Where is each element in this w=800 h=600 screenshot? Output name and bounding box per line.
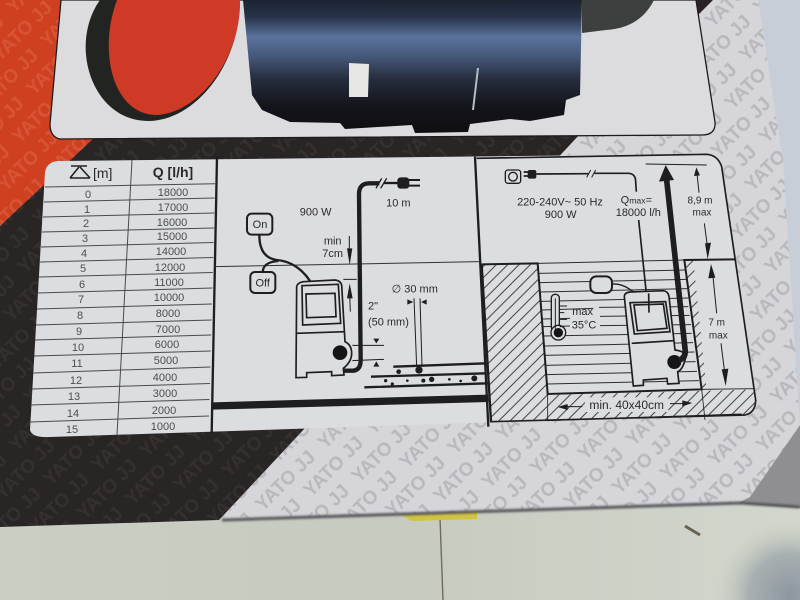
table column: head values: 0 (85, 189, 91, 201)
outer frame (477, 154, 756, 422)
measurement: min. 40x40cm: min. 40x40cm (589, 398, 664, 412)
measurement: hose diameter: 2" (368, 300, 378, 312)
table column: head values: 6 (79, 279, 85, 291)
photo: pump body (243, 0, 654, 133)
table column: flow values: 8000 (156, 308, 180, 320)
table header: head: [m] (93, 165, 112, 181)
measurement: hose diameter: (50 mm) (368, 316, 409, 328)
switch: On: On (253, 219, 267, 231)
table column: head values: 5 (80, 263, 86, 275)
measurement: 8,9 m max (688, 167, 712, 259)
label: Qmax flow: 18000 l/h (616, 207, 661, 219)
table column: head values: 7 (78, 294, 84, 306)
panel: installation in shallow water (212, 157, 488, 433)
pump (624, 291, 686, 386)
arrow: delivery head (646, 164, 707, 360)
table column: head values: 2 (83, 218, 89, 230)
label: 900 W: 900 W (300, 207, 332, 219)
table: head and flow (30, 160, 215, 436)
table column: flow values: 10000 (154, 292, 184, 304)
thermometer and max temperature (551, 294, 596, 340)
table column: flow values: 18000 (158, 187, 188, 199)
measurement: 8,9 m max: 8,9 m (688, 195, 712, 206)
measurement: hose diameter (352, 300, 409, 367)
table column: head values: 10 (72, 342, 84, 354)
water lines (538, 260, 699, 384)
measurement: min 7cm: 7cm (322, 248, 343, 260)
table column: head values: 1 (84, 204, 90, 216)
yellow object under box (398, 511, 477, 521)
float switch cords (259, 235, 316, 293)
table column: flow values: 1000 (151, 421, 175, 433)
panel: product photo (50, 0, 715, 139)
pit outline (482, 259, 735, 394)
measurement: 8,9 m max: max (693, 207, 711, 218)
box background: dark band (0, 133, 581, 527)
thermometer and max temperature: max (572, 306, 594, 318)
table column: head values: 12 (70, 375, 82, 387)
measurement: min 7cm (322, 235, 357, 312)
measurement: 7 m max: max (709, 331, 728, 342)
label: Qmax flow (616, 194, 661, 219)
measurement: 7 m max (708, 264, 728, 386)
thermometer and max temperature: 35°C (572, 319, 596, 331)
table column: flow values (151, 187, 188, 433)
sediment floor (364, 363, 488, 387)
table column: head values: 11 (71, 358, 83, 370)
switch: On (247, 214, 272, 235)
table column: head values: 13 (68, 391, 80, 403)
table column: head values: 15 (66, 424, 78, 436)
table column: flow values: 14000 (156, 246, 186, 258)
dark corner top right (694, 0, 713, 15)
hatched walls (482, 260, 756, 422)
panel: specification sheet (30, 154, 756, 437)
table column: flow values: 17000 (158, 202, 188, 214)
panel: maximum head installation (477, 154, 756, 422)
table column: head values: 14 (67, 408, 79, 420)
label: voltage and power: 220-240V~ 50 Hz (517, 196, 603, 208)
table column: head values (66, 189, 91, 436)
measurement: min. 40x40cm (558, 397, 692, 412)
measurement: particle size 30 mm: ∅ 30 mm (392, 283, 438, 295)
table header: flow: Q [l/h] (153, 164, 193, 180)
table column: flow values: 11000 (154, 277, 184, 289)
table column: head values: 3 (82, 233, 88, 245)
label: voltage and power: 900 W (545, 209, 577, 221)
pump outline (296, 280, 352, 378)
table column: flow values: 12000 (155, 262, 185, 274)
table column: flow values: 7000 (156, 324, 180, 336)
table column: flow values: 4000 (153, 372, 177, 384)
table column: head values: 4 (81, 248, 87, 260)
table column: flow values: 5000 (154, 355, 178, 367)
measurement: particle size 30 mm (392, 283, 438, 367)
table column: head values: 8 (77, 310, 83, 322)
table column: flow values: 15000 (157, 231, 187, 243)
measurement: 7 m max: 7 m (708, 318, 725, 329)
label: voltage and power (517, 196, 603, 221)
cable and plug (343, 177, 420, 371)
box right edge strip (222, 0, 800, 520)
table grid lines (30, 160, 215, 435)
table column: flow values: 3000 (153, 388, 177, 400)
table column: head values: 9 (76, 326, 82, 338)
float switch (590, 276, 643, 303)
switch: Off: Off (255, 278, 271, 290)
label: Qmax flow: Qmax= (621, 194, 652, 206)
label: 10 m: 10 m (386, 198, 411, 210)
table column: flow values: 16000 (157, 217, 187, 229)
icon: head height symbol (70, 166, 90, 178)
socket and power cable (505, 170, 648, 313)
table column: flow values: 6000 (155, 339, 179, 351)
box background: red corner (0, 0, 100, 226)
table column: flow values: 2000 (152, 405, 176, 417)
photo: red pump disc (86, 0, 240, 121)
measurement: min 7cm: min (324, 235, 342, 247)
switch: Off (250, 272, 275, 293)
